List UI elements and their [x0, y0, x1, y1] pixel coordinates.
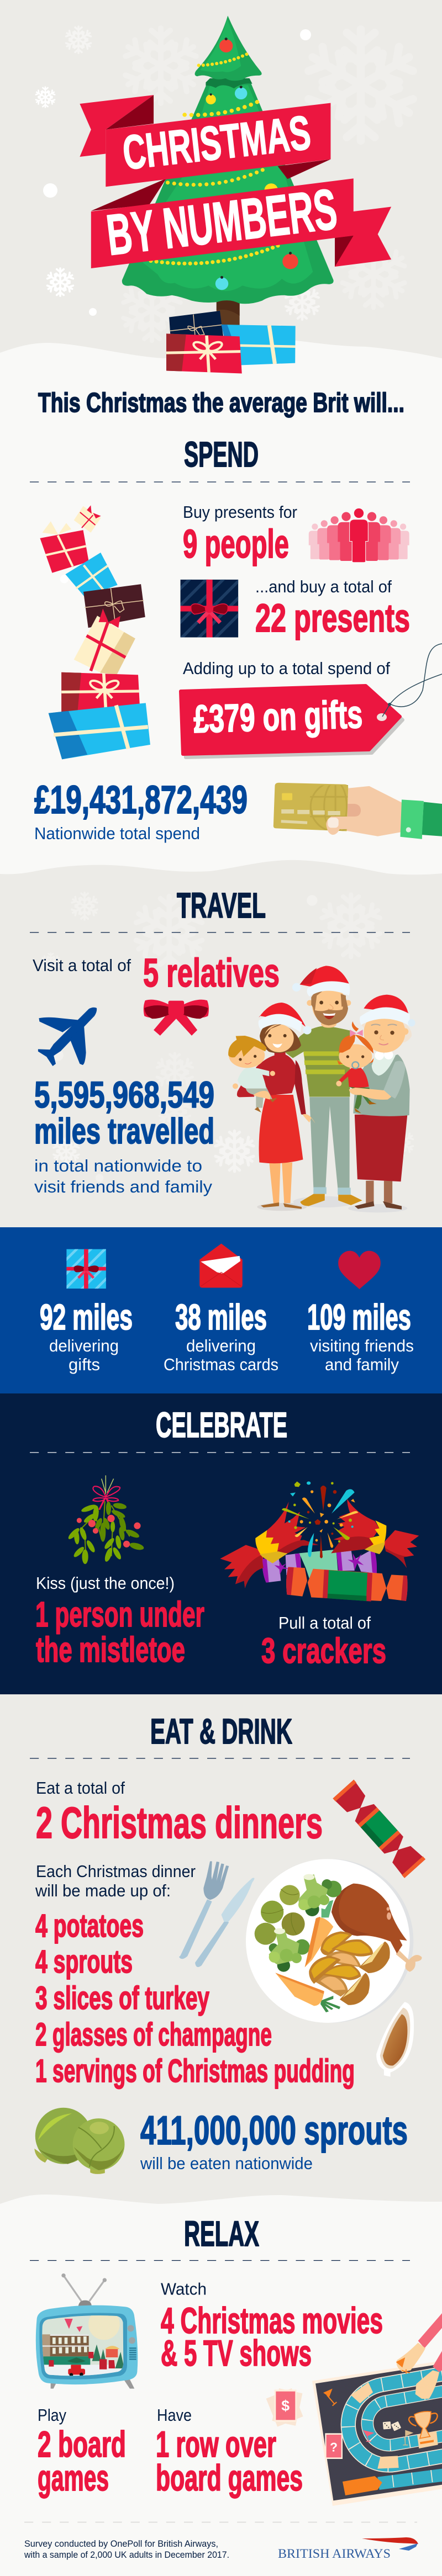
footer: survey note: with a sample of 2,000 UK adults in December 2017. — [24, 2550, 229, 2560]
illustration: hand with credit card — [273, 781, 442, 839]
footer: survey note: Survey conducted by OnePoll for British Airways, — [24, 2538, 218, 2549]
logo: british airways — [278, 2537, 418, 2561]
stat: 379 pounds on gifts: £379 on gifts — [193, 693, 363, 741]
gifts under the tree — [166, 311, 296, 373]
illustration: crackers — [220, 1481, 419, 1602]
text: visiting friends and family: and family — [325, 1355, 399, 1374]
text: visit a total of: Visit a total of — [33, 956, 131, 975]
text: pull a total of: Pull a total of — [278, 1613, 371, 1632]
text: delivering christmas cards: delivering — [186, 1336, 256, 1355]
text: in total nationwide: in total nationwide to — [34, 1156, 202, 1175]
text: eaten nationwide: will be eaten nationwide — [140, 2154, 313, 2173]
text: play: Play — [38, 2405, 66, 2425]
panel: relax — [0, 2195, 442, 2576]
stat: 9 people: 9 people — [183, 522, 289, 566]
heading: relax: RELAX — [184, 2214, 259, 2254]
illustration: christmas dinner plate — [246, 1859, 422, 2023]
column: gifts — [40, 1247, 133, 1374]
stat: miles travelled number: 5,595,968,549 — [34, 1074, 214, 1116]
text: in total nationwide: visit friends and family — [34, 1177, 213, 1196]
heading: spend: SPEND — [184, 434, 259, 474]
icon: gravy boat — [376, 2002, 414, 2077]
icon: navy present — [180, 580, 239, 637]
text: and buy a total of: ...and buy a total of — [255, 577, 392, 596]
text: each christmas dinner: Each Christmas dinner — [36, 1862, 196, 1881]
panel: miles breakdown — [0, 1227, 442, 1394]
stat: 1 row over board games — [156, 2424, 303, 2498]
heading: eat and drink: EAT & DRINK — [150, 1711, 292, 1751]
illustration: stack of gifts — [40, 505, 150, 759]
stat: 1 row over board games: 1 row over — [156, 2424, 276, 2464]
icon: red bow — [144, 1000, 209, 1036]
stat: miles travelled: miles travelled — [34, 1111, 214, 1151]
column: visiting — [307, 1251, 414, 1374]
snowflakes and snow dots — [35, 26, 417, 341]
text: in total nationwide — [34, 1156, 213, 1196]
heading: travel: TRAVEL — [177, 886, 266, 925]
text: delivering gifts — [49, 1336, 119, 1374]
panel: header — [0, 0, 442, 442]
illustration: board game — [266, 2313, 442, 2506]
footer: survey note — [24, 2538, 229, 2560]
faint snowflakes — [41, 893, 414, 1182]
cards: dollar — [266, 2388, 303, 2427]
text: each christmas dinner: will be made up of: — [35, 1881, 171, 1900]
title: christmas: CHRISTMAS — [120, 105, 313, 180]
text: delivering christmas cards: Christmas cards — [164, 1355, 278, 1374]
panel: celebrate — [0, 1393, 442, 1695]
text: nationwide total spend: Nationwide total spend — [34, 824, 200, 843]
ribbon banner — [80, 95, 391, 268]
snow ground — [0, 341, 442, 442]
text: adding up: Adding up to a total spend of — [183, 659, 390, 678]
stat: 2 board games: games — [38, 2457, 109, 2498]
icon: sprouts — [34, 2108, 125, 2174]
text: kiss: Kiss (just the once!) — [36, 1573, 175, 1593]
stat: 3 crackers: 3 crackers — [261, 1631, 386, 1671]
text: delivering gifts: delivering — [49, 1336, 119, 1355]
stat: 38 miles: 38 miles — [175, 1297, 267, 1337]
illustration: television — [36, 2273, 138, 2389]
list: dinner contents: 2 glasses of champagne — [35, 2017, 272, 2053]
icon: envelope — [199, 1243, 243, 1288]
illustration: family in santa hats — [228, 966, 415, 1212]
list: dinner contents: 4 potatoes — [35, 1908, 144, 1944]
text: watch: Watch — [161, 2279, 207, 2299]
stat: movies and tv shows: & 5 TV shows — [161, 2333, 312, 2373]
list: dinner contents: 3 slices of turkey — [35, 1980, 209, 2016]
stat: 5 relatives: 5 relatives — [143, 951, 280, 995]
text: delivering gifts: gifts — [69, 1355, 100, 1374]
icon: blue gift — [66, 1249, 106, 1289]
icon: heart — [338, 1251, 381, 1289]
stat: 92 miles: 92 miles — [40, 1297, 133, 1337]
icon: plane — [38, 1008, 97, 1066]
stat: 1 person under the mistletoe: the mistletoe — [36, 1630, 185, 1669]
text: buy presents for: Buy presents for — [183, 502, 297, 522]
stat: 2 board games: 2 board — [38, 2424, 126, 2464]
panel: spend — [30, 441, 442, 842]
column: cards — [164, 1243, 278, 1374]
text: delivering christmas cards — [164, 1336, 278, 1374]
stat: 2 board games — [38, 2424, 126, 2498]
panel: eat and drink — [0, 1694, 442, 2213]
stat: nationwide spend: £19,431,872,439 — [34, 778, 248, 822]
list: dinner contents — [35, 1908, 355, 2089]
panel: travel — [0, 860, 442, 1228]
text: each christmas dinner — [35, 1862, 196, 1900]
price tag — [181, 644, 442, 757]
stat: 1 person under the mistletoe: 1 person under — [35, 1594, 204, 1634]
text: eat a total of: Eat a total of — [36, 1778, 125, 1798]
stat: 1 row over board games: board games — [156, 2457, 303, 2498]
cards: dollar: $ — [281, 2398, 290, 2414]
heading: celebrate: CELEBRATE — [156, 1405, 287, 1445]
icon: fork and knife — [179, 1861, 254, 1967]
icon: small cracker — [333, 1780, 425, 1878]
stat: 1 person under the mistletoe — [35, 1594, 204, 1669]
icon: group of nine people — [309, 508, 409, 563]
christmas tree illustration — [80, 15, 391, 373]
text: visiting friends and family: visiting friends — [310, 1336, 414, 1355]
icon: mistletoe — [67, 1475, 145, 1564]
text: have: Have — [157, 2405, 192, 2425]
card: question mark: ? — [330, 2440, 338, 2455]
logo: british airways: BRITISH AIRWAYS — [278, 2547, 391, 2561]
list: dinner contents: 4 sprouts — [35, 1944, 133, 1980]
card: question mark — [325, 2433, 343, 2459]
text: visiting friends and family — [310, 1336, 414, 1374]
stat: movies and tv shows — [161, 2300, 383, 2373]
